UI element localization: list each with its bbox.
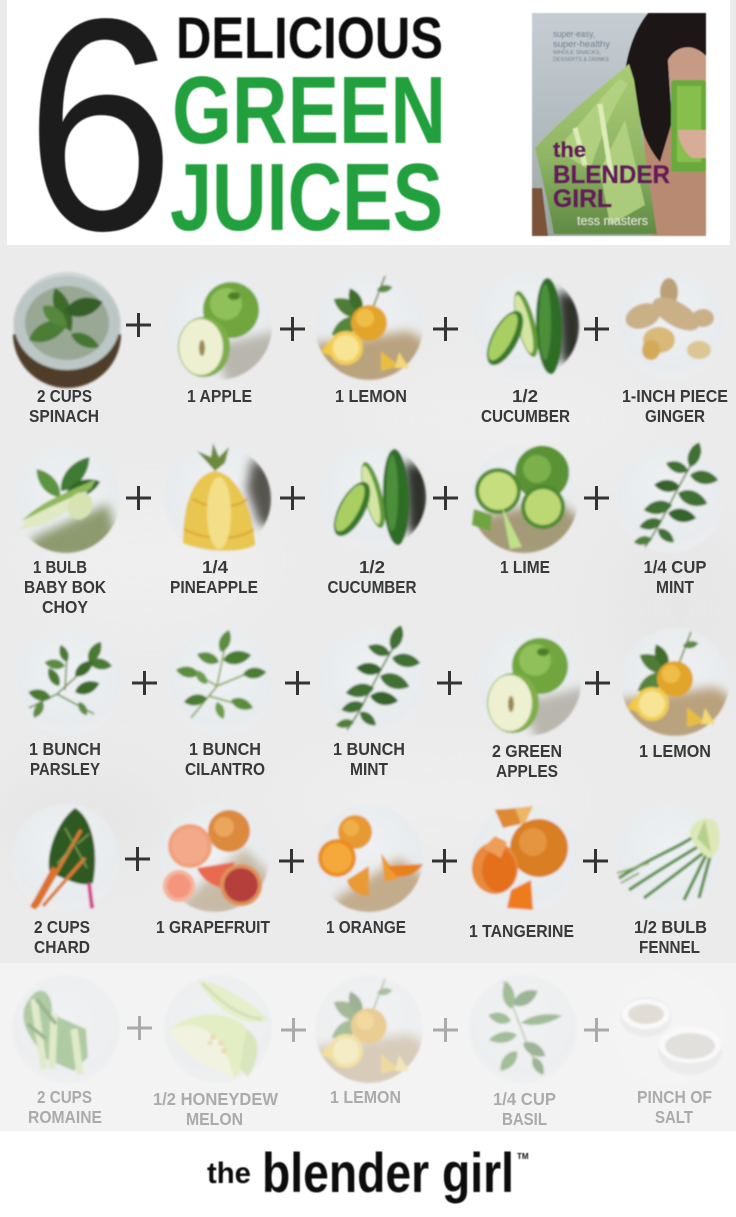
cover photo: hand: [678, 130, 706, 158]
cover photo: face: [668, 47, 706, 120]
ingredient: spinach: [13, 272, 121, 426]
ingredient: orange: 1 ORANGE: [326, 917, 406, 937]
ingredient: baby bok choy: BABY BOK: [24, 577, 106, 597]
ingredient: cucumber: CUCUMBER: [481, 406, 570, 426]
book cover: [532, 13, 706, 236]
ingredient: ginger: 1-INCH PIECE: [622, 386, 728, 406]
ingredient: ginger: [617, 272, 728, 426]
ingredient: mint: MINT: [350, 759, 388, 779]
ingredient: lime: 1 LIME: [500, 557, 550, 577]
ingredient: cucumber: [318, 443, 432, 597]
juice row 1: [13, 272, 728, 426]
ingredient: orange: [315, 804, 429, 937]
cover text: tagline: [553, 29, 611, 63]
title: delicious: DELICIOUS: [176, 6, 443, 71]
ingredient: baby bok choy: CHOY: [42, 597, 88, 617]
ingredient: romaine: [12, 975, 120, 1127]
footer logo: TM: [517, 1152, 529, 1161]
cover photo: lower-left hand: [532, 188, 548, 236]
ingredient: fennel: FENNEL: [639, 937, 700, 957]
ingredient: cucumber: 1/2: [359, 557, 385, 577]
juice row 2: [12, 441, 724, 617]
cover title: [553, 139, 670, 213]
ingredient: green apples: [473, 628, 587, 781]
footer logo: the: [207, 1157, 251, 1190]
title: juices: JUICES: [170, 144, 443, 251]
ingredient: fennel: 1/2 BULB: [634, 917, 707, 937]
ingredient: baby bok choy: [12, 445, 120, 617]
plus: [280, 486, 305, 510]
ingredient: basil: 1/4 CUP: [493, 1089, 556, 1109]
cover text: tagline: DESSERTS & DRINKS: [553, 57, 610, 63]
ingredient: cucumber: CUCUMBER: [328, 577, 417, 597]
ingredient: honeydew melon: 1/2 HONEYDEW: [153, 1089, 278, 1109]
ingredient: lemon: 1 LEMON: [335, 386, 407, 406]
ingredient: romaine: 2 CUPS: [37, 1087, 92, 1107]
cover photo: blender with green juice: [535, 64, 657, 234]
cover photo: green glass: [671, 80, 706, 172]
ingredient: parsley: 1 BUNCH: [29, 739, 101, 759]
ingredient: grapefruit: [156, 804, 275, 937]
ingredient: green apples: 2 GREEN: [492, 741, 562, 761]
ingredient: lemon: 1 LEMON: [639, 741, 711, 761]
ingredient: pineapple: PINEAPPLE: [170, 577, 258, 597]
lighter band: row 5: [0, 963, 736, 1131]
ingredient: lemon: [615, 628, 735, 761]
plus: [279, 849, 304, 873]
plus: [585, 671, 610, 695]
ingredient: lemon: [309, 975, 429, 1107]
cover text: tagline: super-easy,: [553, 29, 595, 39]
plus: [437, 671, 462, 695]
header panel: [7, 0, 730, 245]
ingredient: salt: SALT: [655, 1107, 693, 1127]
ingredient: chard: [11, 804, 119, 957]
plus: [584, 317, 609, 341]
ingredient: honeydew melon: [153, 975, 278, 1129]
plus: [433, 1018, 458, 1042]
ingredient: mint: 1 BUNCH: [333, 739, 405, 759]
cover title: GIRL: [553, 185, 612, 213]
plus: [584, 1018, 609, 1042]
cover title: the: [553, 139, 586, 162]
ingredient: honeydew melon: MELON: [186, 1109, 243, 1129]
cover author: tess masters: [577, 213, 648, 228]
cover title: BLENDER: [553, 161, 670, 189]
ingredient: fennel: [615, 804, 723, 957]
cover photo: hair: [625, 13, 706, 162]
marble texture patches: [0, 370, 736, 870]
ingredient: green apples: APPLES: [496, 761, 558, 781]
cover text: tagline: WHOLE SNACKS,: [553, 50, 601, 56]
plus: [433, 486, 458, 510]
ingredient: basil: [469, 975, 577, 1129]
ingredient: chard: 2 CUPS: [34, 917, 90, 937]
title: [26, 0, 446, 293]
footer logo: blender girl: [262, 1141, 514, 1204]
footer panel: [0, 1131, 736, 1217]
ingredient: lemon: [309, 272, 429, 406]
plus: [125, 847, 150, 871]
ingredient: pineapple: 1/4: [202, 557, 228, 577]
ingredient: tangerine: [469, 804, 579, 941]
ingredient: basil: BASIL: [502, 1109, 547, 1129]
ingredient: apple: 1 APPLE: [187, 386, 252, 406]
ingredient: cucumber: 1/2: [512, 386, 538, 406]
ingredient: tangerine: 1 TANGERINE: [469, 921, 574, 941]
plus: [132, 671, 157, 695]
ingredient: lemon: 1 LEMON: [330, 1087, 401, 1107]
ingredient: salt: PINCH OF: [637, 1087, 712, 1107]
ingredient: mint: [616, 441, 724, 597]
juice row 5 (faded): [12, 975, 724, 1129]
plus: [127, 1016, 152, 1040]
ingredient: chard: CHARD: [34, 937, 90, 957]
ingredient: apple: [164, 272, 278, 406]
ingredient: mint: MINT: [656, 577, 694, 597]
ingredient: parsley: PARSLEY: [30, 759, 100, 779]
ingredient: cilantro: 1 BUNCH: [189, 739, 261, 759]
plus: [281, 1018, 306, 1042]
ingredient: cucumber: [471, 272, 585, 426]
plus: [280, 317, 305, 341]
ingredient: romaine: ROMAINE: [28, 1107, 102, 1127]
plus: [433, 317, 458, 341]
cover photo: skin of torso: [643, 120, 706, 236]
ingredient: mint: [318, 624, 426, 779]
plus: [285, 671, 310, 695]
plus: [583, 849, 608, 873]
title: green: GREEN: [172, 57, 446, 164]
juice row 3: [15, 624, 735, 781]
ingredient: spinach: 2 CUPS: [37, 386, 92, 406]
juice row 4: [11, 804, 723, 957]
ingredient: salt: [616, 975, 724, 1127]
plus: [432, 849, 457, 873]
plus: [584, 486, 609, 510]
ingredient: cilantro: CILANTRO: [185, 759, 265, 779]
ingredient: parsley: [15, 628, 123, 779]
ingredient: grapefruit: 1 GRAPEFRUIT: [156, 917, 270, 937]
ingredient: ginger: GINGER: [645, 406, 705, 426]
plus: [126, 486, 151, 510]
ingredient: baby bok choy: 1 BULB: [33, 557, 87, 577]
ingredient: pineapple: [163, 443, 277, 597]
ingredient: spinach: SPINACH: [29, 406, 99, 426]
ingredient: lime: [464, 445, 584, 577]
cover text: tagline: super-healthy: [553, 39, 611, 49]
ingredient: mint: 1/4 CUP: [644, 557, 707, 577]
plus: [126, 313, 151, 337]
ingredient: cilantro: [167, 628, 275, 779]
